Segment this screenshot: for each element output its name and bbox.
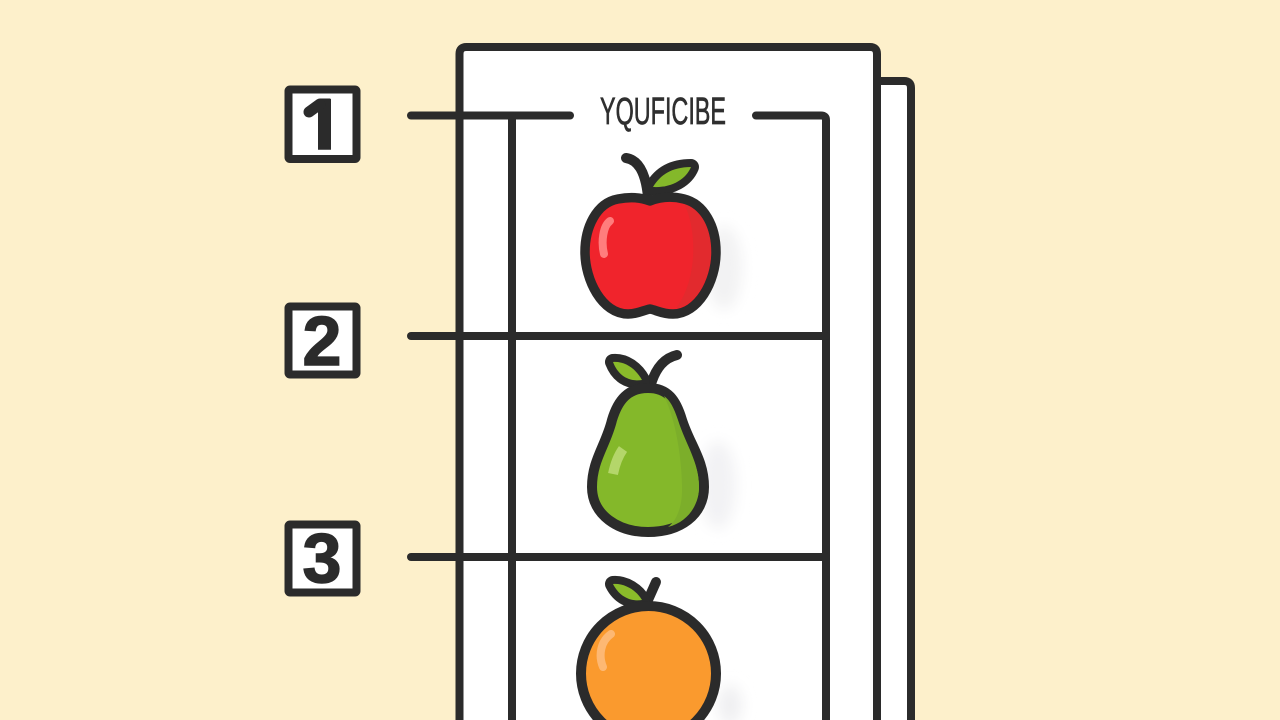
number badge 3: 3 (303, 519, 341, 597)
icon: orange (581, 582, 742, 720)
number badge 2: 2 (303, 302, 341, 380)
icon: pear (592, 355, 736, 532)
back page (877, 81, 911, 720)
table frame and row lines (411, 116, 826, 720)
number badge 1 (288, 85, 356, 165)
number badge 3 (288, 519, 356, 597)
front page (460, 47, 877, 720)
icon: apple (585, 158, 742, 314)
table heading: YQUFICIBE (600, 91, 726, 133)
number badge 2 (288, 302, 356, 380)
number badge 1: 1 (303, 85, 343, 165)
infographic canvas (284, 43, 915, 720)
